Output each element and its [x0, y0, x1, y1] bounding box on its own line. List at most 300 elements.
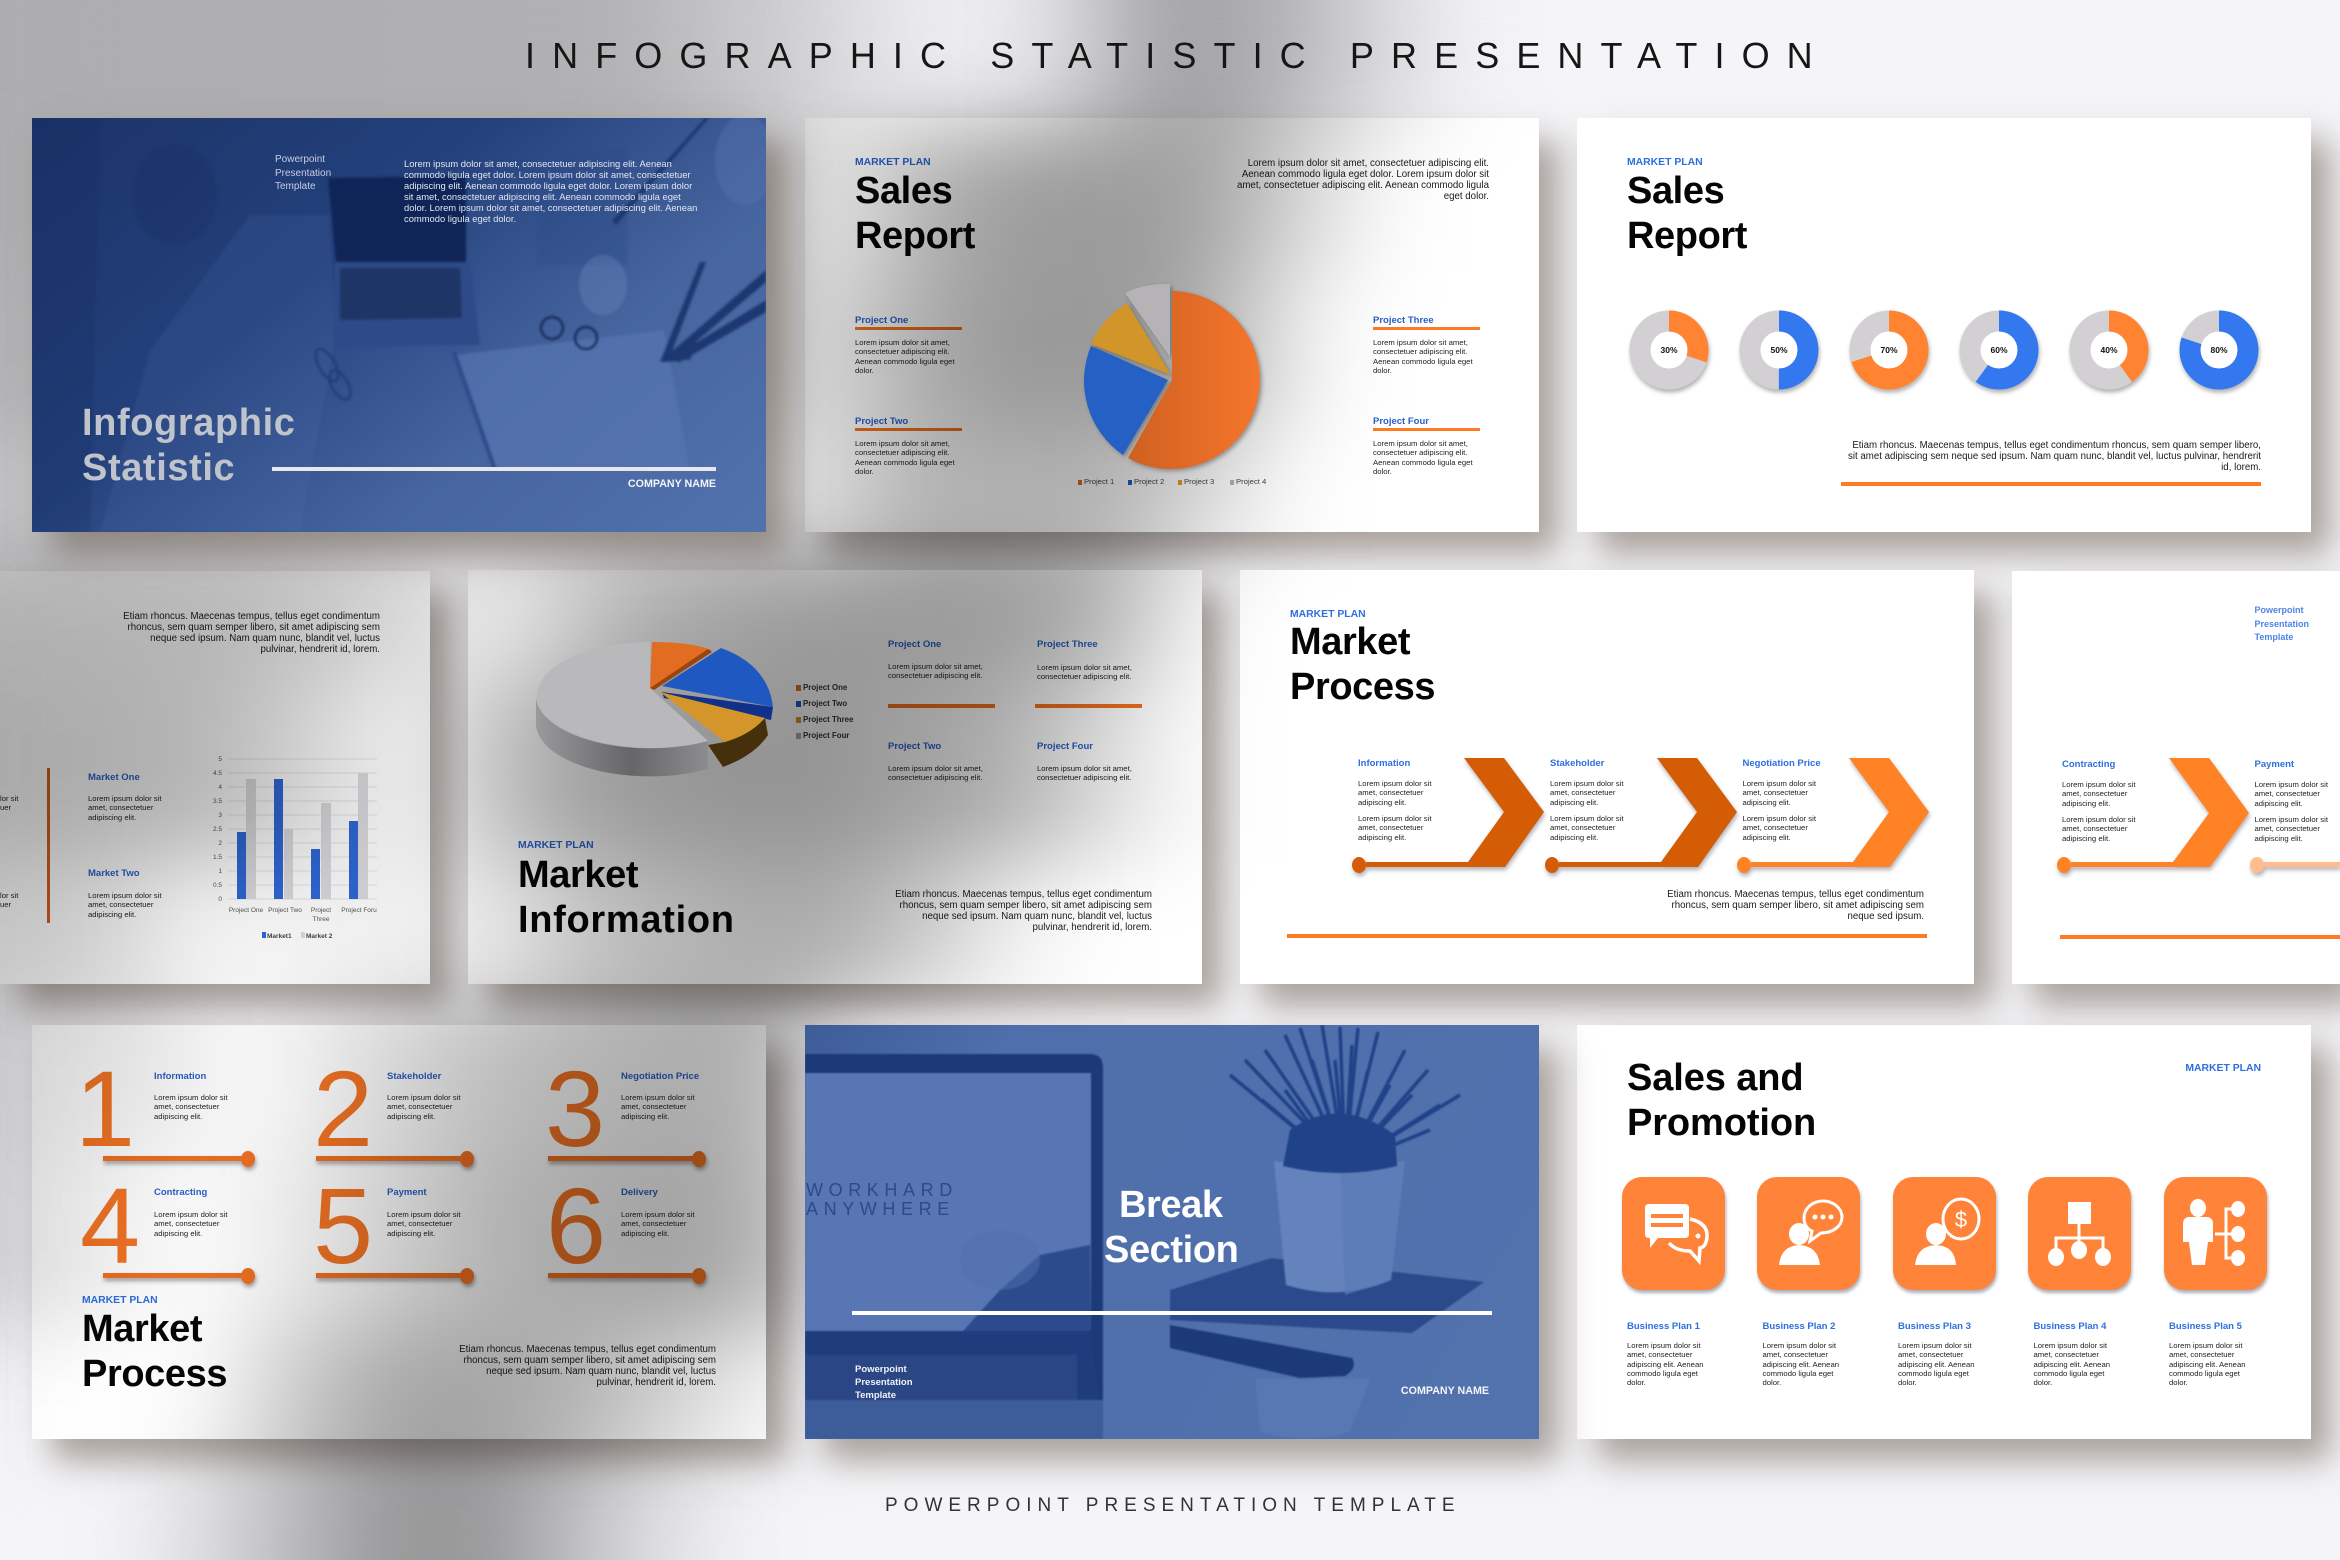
icon tile: org chart — [2028, 1177, 2131, 1290]
intro text — [1237, 158, 1489, 202]
step negotiation price: amet, consectetuer — [1742, 823, 1808, 832]
step negotiation price: adipiscing elit. — [1742, 798, 1791, 807]
business plan 4: amet, consectetuer — [2034, 1350, 2099, 1359]
number 4: 4 — [80, 1165, 140, 1286]
business plan 4: commodo ligula eget — [2034, 1369, 2104, 1378]
chevron arrows — [1350, 758, 1932, 878]
step payment: Lorem ipsum dolor sit — [387, 1210, 460, 1219]
business plan 5: dolor. — [2169, 1378, 2188, 1387]
project four: dolor. — [1373, 467, 1392, 476]
business plan 4: dolor. — [2034, 1378, 2052, 1387]
business plan 2: adipiscing elit. Aenean — [1762, 1360, 1839, 1369]
business plan 4: Business Plan 4 — [2034, 1321, 2106, 1332]
step stakeholder: amet, consectetuer — [1550, 788, 1615, 797]
bar chart: 4 — [218, 784, 222, 791]
project four: Lorem ipsum dolor sit amet, — [1037, 764, 1132, 773]
bar chart: 0.5 — [213, 882, 222, 889]
heading: break section: Break — [1119, 1184, 1223, 1226]
donut 60%: 60% — [1990, 345, 2008, 355]
small text: powerpoint presentation template — [2254, 605, 2309, 642]
workhard anywhere screen text: WORKHARD — [806, 1180, 958, 1200]
heading: break section — [1104, 1183, 1238, 1272]
panel: break section — [805, 1025, 1539, 1439]
step information — [154, 1070, 244, 1130]
step contracting: amet, consectetuer — [154, 1219, 219, 1228]
intro text: Aenean commodo ligula eget dolor. Lorem ipsum dolor sit — [1242, 169, 1489, 180]
step negotiation price: Negotiation Price — [621, 1071, 699, 1082]
bar chart — [213, 756, 377, 940]
project one: Lorem ipsum dolor sit amet, — [888, 662, 983, 671]
eyebrow: MARKET PLAN — [2185, 1063, 2261, 1074]
donut 80%: 80% — [2210, 345, 2228, 355]
description text: Etiam rhoncus. Maecenas tempus, tellus eget condimentum — [895, 889, 1152, 900]
heading — [1627, 170, 1747, 256]
chevron contracting — [2057, 758, 2249, 873]
bar chart: Project Foru — [341, 907, 377, 914]
business plan 5: Business Plan 5 — [2169, 1321, 2242, 1332]
panel: market process continued, clipped: adipiscing elit. — [2062, 834, 2110, 843]
project two: consectetuer adipiscing elit. — [855, 448, 949, 457]
pie chart — [1084, 284, 1264, 474]
pie legend: Project Four — [803, 731, 849, 740]
step information: adipiscing elit. — [1358, 798, 1406, 807]
icon tile: chat bubbles — [1622, 1177, 1724, 1290]
step stakeholder: amet, consectetuer — [1550, 823, 1615, 832]
step information: Information — [1358, 758, 1410, 769]
heading: infographic statistic: Infographic — [82, 402, 296, 444]
description text: neque sed ipsum. — [1848, 911, 1924, 922]
project two: Lorem ipsum dolor sit amet, — [888, 764, 983, 773]
small text: powerpoint presentation template: Powerpoint — [2254, 605, 2304, 615]
panel: market process chevrons — [1240, 570, 1974, 984]
description text: sit amet adipiscing sem neque sed ipsum. Nam quam nunc, blandit vel, luctus pulvinar, hendrerit — [1848, 451, 2261, 462]
icon tile: person speech — [1757, 1177, 1860, 1290]
description text — [123, 611, 380, 655]
panel: market process continued, clipped — [2012, 571, 2340, 984]
donut charts — [1628, 310, 2262, 395]
clipped text fragment two — [0, 891, 18, 909]
step contracting: Lorem ipsum dolor sit — [2062, 780, 2136, 789]
step payment: amet, consectetuer — [387, 1219, 452, 1228]
step payment: amet, consectetuer — [2254, 824, 2320, 833]
heading — [1627, 1056, 1816, 1145]
bar chart: Market1 — [267, 933, 292, 940]
business plan 4: Lorem ipsum dolor sit — [2034, 1341, 2107, 1350]
step payment: Lorem ipsum dolor sit — [2254, 815, 2328, 824]
business plan 2: Lorem ipsum dolor sit — [1762, 1341, 1836, 1350]
project two: consectetuer adipiscing elit. — [888, 773, 982, 782]
business plan 3: commodo ligula eget — [1898, 1369, 1969, 1378]
step payment — [2254, 759, 2328, 843]
step negotiation price: Lorem ipsum dolor sit — [1742, 779, 1816, 788]
step contracting: Contracting — [154, 1187, 207, 1198]
business plan 3: Lorem ipsum dolor sit — [1898, 1341, 1972, 1350]
chevron 1 — [1352, 758, 1544, 873]
pie legend: Project 3 — [1184, 477, 1214, 486]
eyebrow: MARKET PLAN — [1290, 609, 1366, 620]
heading — [855, 170, 975, 256]
market two: Market Two — [88, 868, 140, 879]
bar chart: 4.5 — [213, 770, 222, 777]
pie legend: Project 1 — [1084, 477, 1114, 486]
project one: Aenean commodo ligula eget — [855, 357, 955, 366]
white rule — [852, 1311, 1492, 1315]
step information: amet, consectetuer — [1358, 823, 1423, 832]
step negotiation price: amet, consectetuer — [621, 1102, 686, 1111]
text block: lorem intro: dolor. Lorem ipsum dolor sit amet, consectetuer adipiscing elit. Aenean — [404, 202, 697, 213]
project one: dolor. — [855, 366, 874, 375]
bar chart: 3 — [218, 812, 222, 819]
business plan 3: adipiscing elit. Aenean — [1898, 1360, 1975, 1369]
market one: Lorem ipsum dolor sit — [88, 794, 162, 803]
step contracting: Lorem ipsum dolor sit — [2062, 815, 2136, 824]
project four: Project Four — [1373, 416, 1429, 427]
orange rule — [2060, 935, 2340, 939]
donut 50%: 50% — [1770, 345, 1788, 355]
step information: adipiscing elit. — [154, 1112, 202, 1121]
small text: powerpoint presentation template: Presentation — [855, 1377, 913, 1388]
project four: consectetuer adipiscing elit. — [1373, 448, 1467, 457]
business plan 1: adipiscing elit. Aenean — [1627, 1360, 1704, 1369]
bar chart: Three — [313, 916, 330, 923]
project three: Project Three — [1037, 639, 1098, 650]
project three: consectetuer adipiscing elit. — [1373, 347, 1467, 356]
small text: powerpoint presentation template: Template — [275, 181, 316, 192]
bar chart: 1 — [218, 868, 222, 875]
number 1: 1 — [75, 1048, 135, 1169]
step stakeholder: adipiscing elit. — [387, 1112, 435, 1121]
eyebrow: MARKET PLAN — [518, 840, 594, 851]
step contracting — [154, 1186, 244, 1246]
company name: COMPANY NAME — [628, 478, 716, 490]
panel: market process numbered — [32, 1025, 766, 1439]
description text: pulvinar, hendrerit id, lorem. — [596, 1377, 716, 1388]
step contracting: adipiscing elit. — [2062, 799, 2110, 808]
bar chart: Project One — [229, 907, 264, 914]
project one: consectetuer adipiscing elit. — [888, 671, 982, 680]
eyebrow: MARKET PLAN — [1627, 157, 1703, 168]
heading: Process — [82, 1352, 227, 1394]
heading: Market — [82, 1308, 202, 1350]
small text: powerpoint presentation template — [855, 1363, 913, 1402]
step payment: adipiscing elit. — [387, 1229, 435, 1238]
project three: Aenean commodo ligula eget — [1373, 357, 1473, 366]
step delivery — [621, 1186, 711, 1246]
market two: adipiscing elit. — [88, 910, 136, 919]
number lines — [102, 1151, 709, 1290]
panel: market bar chart slide — [0, 571, 430, 984]
step delivery: amet, consectetuer — [621, 1219, 686, 1228]
market two: amet, consectetuer — [88, 900, 153, 909]
description text: neque sed ipsum. Nam quam nunc, blandit vel, luctus — [150, 633, 380, 644]
project one: Lorem ipsum dolor sit amet, — [855, 338, 950, 347]
step stakeholder: amet, consectetuer — [387, 1102, 452, 1111]
small text: powerpoint presentation template: Template — [855, 1390, 896, 1401]
small text: powerpoint presentation template: Presentation — [275, 168, 331, 178]
panel: market process continued, clipped: adipiscing elit. — [2254, 834, 2303, 843]
workhard anywhere screen text — [806, 1181, 958, 1219]
step stakeholder: Lorem ipsum dolor sit — [1550, 814, 1624, 823]
step contracting: Lorem ipsum dolor sit — [154, 1210, 228, 1219]
intro text: eget dolor. — [1444, 191, 1489, 202]
step contracting: amet, consectetuer — [2062, 824, 2127, 833]
step information: Information — [154, 1071, 206, 1082]
project three: Lorem ipsum dolor sit amet, — [1037, 663, 1132, 672]
heading: Promotion — [1627, 1102, 1816, 1144]
chevron 2 — [1545, 758, 1737, 873]
project two — [888, 741, 983, 782]
donut 80% — [2190, 321, 2248, 379]
project four: Aenean commodo ligula eget — [1373, 458, 1473, 467]
market one: Market One — [88, 772, 140, 783]
pie legend: Project 2 — [1134, 477, 1164, 486]
step negotiation price — [621, 1070, 711, 1130]
project two: Lorem ipsum dolor sit amet, — [855, 439, 950, 448]
business plan 3: Business Plan 3 — [1898, 1321, 1971, 1332]
business plan 2 — [1762, 1320, 1848, 1388]
description text: rhoncus, sem quam semper libero, sit amet adipiscing sem — [899, 900, 1152, 911]
project two: Aenean commodo ligula eget — [855, 458, 955, 467]
panel: market process chevrons: adipiscing elit. — [1742, 833, 1791, 842]
small text: powerpoint presentation template — [275, 154, 331, 192]
heading — [518, 854, 735, 940]
text block: lorem intro: Lorem ipsum dolor sit amet, consectetuer adipiscing elit. Aenean — [404, 158, 672, 169]
heading: break section: Section — [1104, 1228, 1238, 1270]
chevron 3 — [1737, 758, 1929, 873]
text block: lorem intro: adipiscing elit. Aenean commodo ligula eget dolor. Lorem ipsum dolor — [404, 180, 692, 191]
step stakeholder — [1550, 758, 1624, 842]
bar chart: 2.5 — [213, 826, 222, 833]
panel: sales report with donuts — [1577, 118, 2311, 532]
step stakeholder: Lorem ipsum dolor sit — [1550, 779, 1624, 788]
step contracting: amet, consectetuer — [2062, 789, 2127, 798]
donut 50% — [1750, 321, 1808, 379]
step negotiation price: Negotiation Price — [1742, 758, 1821, 769]
eyebrow: MARKET PLAN — [855, 157, 931, 168]
description text: Etiam rhoncus. Maecenas tempus, tellus eget condimentum rhoncus, sem quam semper libero, — [1852, 440, 2261, 451]
chevron payment, faded — [2250, 857, 2340, 873]
heading: Market — [1290, 621, 1410, 663]
bar chart: Project Two — [268, 907, 302, 914]
donut 70%: 70% — [1880, 345, 1898, 355]
step payment: Lorem ipsum dolor sit — [2254, 780, 2328, 789]
small text: powerpoint presentation template: Powerpoint — [855, 1364, 907, 1375]
bar chart: 3.5 — [213, 798, 222, 805]
bar chart: 0 — [218, 896, 222, 903]
clipped text fragment one — [0, 794, 18, 812]
project three: Lorem ipsum dolor sit amet, — [1373, 338, 1468, 347]
business plan 3: amet, consectetuer — [1898, 1350, 1963, 1359]
step information — [1358, 758, 1432, 842]
donut 60% — [1970, 321, 2028, 379]
company name: COMPANY NAME — [1401, 1385, 1489, 1397]
project one — [855, 315, 962, 375]
description text — [895, 889, 1152, 933]
clipped text fragment two: uer — [0, 900, 11, 909]
bar chart: 2 — [218, 840, 222, 847]
heading: Information — [518, 898, 735, 940]
description text: pulvinar, hendrerit id, lorem. — [1032, 922, 1152, 933]
market one: adipiscing elit. — [88, 813, 136, 822]
step stakeholder — [387, 1070, 477, 1130]
business plan 3: dolor. — [1898, 1378, 1917, 1387]
project two: Project Two — [855, 416, 908, 427]
project four — [1037, 741, 1132, 782]
3d pie chart — [536, 642, 773, 776]
text block: lorem intro — [404, 158, 697, 224]
icon tile: person money: $ — [1954, 1207, 1967, 1232]
bar chart: 5 — [218, 756, 222, 763]
market two: Lorem ipsum dolor sit — [88, 891, 162, 900]
step delivery: Delivery — [621, 1187, 658, 1198]
business plan 5: Lorem ipsum dolor sit — [2169, 1341, 2242, 1350]
project two: Project Two — [888, 741, 941, 752]
description text: Etiam rhoncus. Maecenas tempus, tellus eget condimentum — [1667, 889, 1924, 900]
business plan 3 — [1898, 1320, 1983, 1388]
business plan 2: commodo ligula eget — [1762, 1369, 1833, 1378]
step information: Lorem ipsum dolor sit — [1358, 814, 1432, 823]
project four: consectetuer adipiscing elit. — [1037, 773, 1131, 782]
panel: sales report with pie: Project 4 — [1236, 477, 1266, 486]
cover photo of desk with laptop — [50, 118, 766, 530]
step payment: Payment — [2254, 759, 2294, 770]
clipped text fragment two: lor sit — [0, 891, 18, 900]
step information: Lorem ipsum dolor sit — [1358, 779, 1432, 788]
vertical accent rule — [47, 768, 50, 923]
heading: Sales and — [1627, 1057, 1804, 1099]
project three — [1035, 639, 1142, 708]
step negotiation price: Lorem ipsum dolor sit — [621, 1093, 694, 1102]
step information: amet, consectetuer — [154, 1102, 219, 1111]
step payment: Payment — [387, 1187, 427, 1198]
step negotiation price — [1742, 758, 1821, 842]
heading: Report — [855, 214, 975, 256]
small text: powerpoint presentation template: Template — [2254, 632, 2293, 642]
project four: Project Four — [1037, 741, 1093, 752]
bar chart: Project — [311, 907, 331, 914]
pie legend: Project Two — [803, 699, 847, 708]
description text — [1848, 440, 2261, 473]
description text: id, lorem. — [2221, 462, 2261, 473]
step negotiation price: amet, consectetuer — [1742, 788, 1808, 797]
workhard anywhere screen text: ANYWHERE — [806, 1199, 955, 1219]
clipped text fragment one: uer — [0, 803, 11, 812]
step information: Lorem ipsum dolor sit — [154, 1093, 228, 1102]
bar chart: Market 2 — [306, 933, 333, 940]
business plan 1: Business Plan 1 — [1627, 1321, 1700, 1332]
heading: infographic statistic: Statistic — [82, 446, 235, 488]
eyebrow: MARKET PLAN — [82, 1295, 158, 1306]
footer subtitle: POWERPOINT PRESENTATION TEMPLATE — [885, 1495, 1461, 1516]
business plan 1: dolor. — [1627, 1378, 1646, 1387]
text block: lorem intro: commodo ligula eget dolor. Lorem ipsum dolor sit amet, consectetuer — [404, 169, 691, 180]
business plan 5: commodo ligula eget — [2169, 1369, 2240, 1378]
business plan 2: dolor. — [1762, 1378, 1781, 1387]
project one: Project One — [855, 315, 908, 326]
heading — [1290, 621, 1435, 708]
business plan 4: adipiscing elit. Aenean — [2034, 1360, 2110, 1369]
donut 30% — [1640, 321, 1698, 379]
panel: market information — [468, 570, 1202, 984]
project two: dolor. — [855, 467, 874, 476]
step stakeholder: adipiscing elit. — [1550, 798, 1598, 807]
title: INFOGRAPHIC STATISTIC PRESENTATION — [525, 35, 1830, 76]
description text — [1667, 889, 1924, 922]
project four — [1373, 416, 1480, 476]
pie legend: Project One — [803, 683, 847, 692]
orange rule — [1841, 482, 2261, 486]
step stakeholder: Lorem ipsum dolor sit — [387, 1093, 460, 1102]
text block: lorem intro: sit amet, consectetuer adipiscing elit. Aenean commodo ligula eget — [404, 191, 681, 202]
business plan 2: amet, consectetuer — [1762, 1350, 1828, 1359]
description text: pulvinar, hendrerit id, lorem. — [260, 644, 380, 655]
step negotiation price: Lorem ipsum dolor sit — [1742, 814, 1816, 823]
donut 40%: 40% — [2100, 345, 2118, 355]
panel: sales and promotion — [1577, 1025, 2311, 1439]
project one — [888, 639, 995, 708]
step stakeholder: Stakeholder — [1550, 758, 1604, 769]
heading: Sales — [855, 170, 952, 212]
heading — [82, 1307, 227, 1396]
panel: sales report with pie — [805, 118, 1539, 532]
text block: lorem intro: commodo ligula eget dolor. — [404, 213, 516, 224]
step payment: adipiscing elit. — [2254, 799, 2303, 808]
business plan 4 — [2034, 1320, 2118, 1388]
project three: dolor. — [1373, 366, 1392, 375]
step stakeholder: Stakeholder — [387, 1071, 441, 1082]
heading: Sales — [1627, 170, 1724, 212]
bar chart: 1.5 — [213, 854, 222, 861]
panel: cover slide infographic statistic — [32, 118, 766, 532]
pie legend — [796, 683, 854, 740]
business plan 5: amet, consectetuer — [2169, 1350, 2234, 1359]
intro text: Lorem ipsum dolor sit amet, consectetuer adipiscing elit. — [1248, 158, 1489, 169]
business plan 1 — [1627, 1320, 1712, 1388]
icon tile: person network — [2164, 1177, 2266, 1290]
clipped text fragment one: lor sit — [0, 794, 18, 803]
description text: neque sed ipsum. Nam quam nunc, blandit vel, luctus — [922, 911, 1152, 922]
description text: rhoncus, sem quam semper libero, sit amet adipiscing sem — [463, 1355, 716, 1366]
donut 40% — [2080, 321, 2138, 379]
white rule — [272, 467, 716, 471]
step contracting — [2062, 759, 2136, 843]
pie legend: Project Three — [803, 715, 853, 724]
market one — [88, 772, 162, 822]
step information: amet, consectetuer — [1358, 788, 1423, 797]
heading: infographic statistic — [82, 402, 296, 488]
description text: Etiam rhoncus. Maecenas tempus, tellus eget condimentum — [459, 1344, 716, 1355]
description text: Etiam rhoncus. Maecenas tempus, tellus eget condimentum — [123, 611, 380, 622]
chevron arrows — [2056, 758, 2340, 878]
pie legend — [1078, 477, 1266, 486]
small text: powerpoint presentation template: Powerpoint — [275, 154, 325, 165]
number 3: 3 — [545, 1048, 605, 1169]
heading: Market — [518, 854, 638, 896]
business plan 1: amet, consectetuer — [1627, 1350, 1692, 1359]
description text: neque sed ipsum. Nam quam nunc, blandit vel, luctus — [486, 1366, 716, 1377]
business plan 5 — [2169, 1320, 2254, 1388]
panel: market process chevrons: adipiscing elit. — [1550, 833, 1598, 842]
market one: amet, consectetuer — [88, 803, 153, 812]
project three: consectetuer adipiscing elit. — [1037, 672, 1131, 681]
number 5: 5 — [313, 1165, 373, 1286]
step contracting: adipiscing elit. — [154, 1229, 202, 1238]
business plan 5: adipiscing elit. Aenean — [2169, 1360, 2246, 1369]
number 6: 6 — [546, 1165, 606, 1286]
description text: rhoncus, sem quam semper libero, sit amet adipiscing sem — [127, 622, 380, 633]
step payment: amet, consectetuer — [2254, 789, 2320, 798]
project three: Project Three — [1373, 315, 1434, 326]
